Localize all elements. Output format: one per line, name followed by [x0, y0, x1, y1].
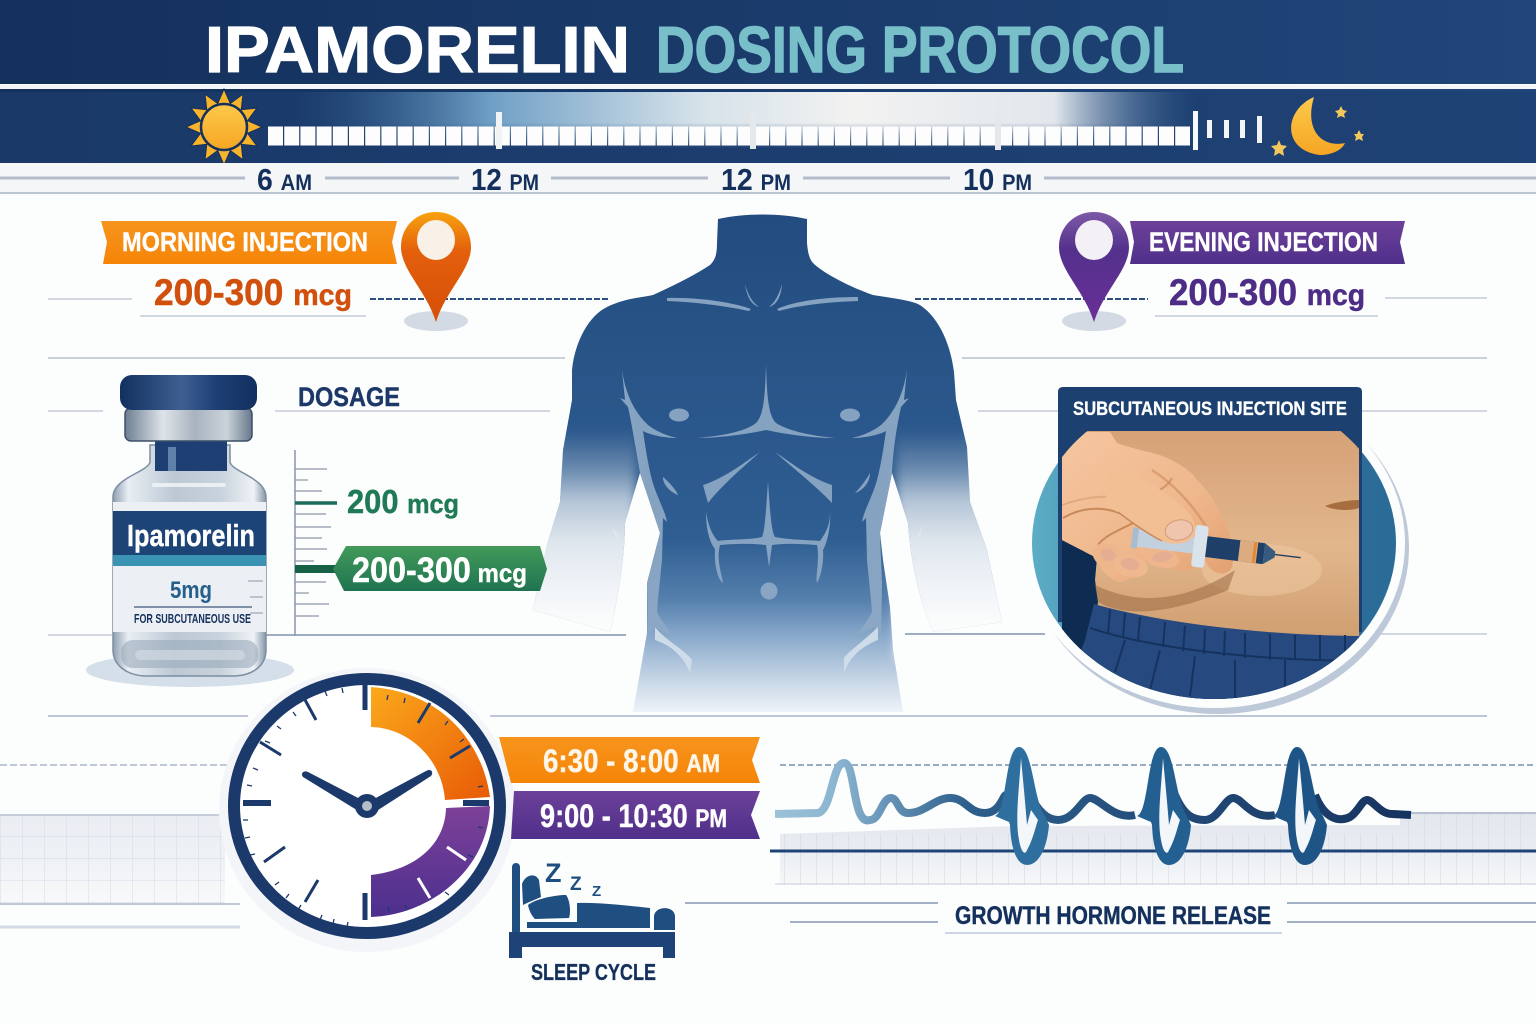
- banner: morning injection: [101, 221, 397, 264]
- vial label: 5mg: [170, 577, 212, 604]
- title text: IPAMORELIN: [205, 13, 630, 86]
- vial label: [113, 502, 266, 632]
- release curve: [775, 763, 1411, 820]
- fingers: [1093, 544, 1180, 578]
- icon: purple pin: [1059, 212, 1129, 331]
- pulse peak 3: [1273, 747, 1327, 865]
- thumb: [1106, 489, 1195, 544]
- banner: morning window: 6:30 - 8:00 AM: [543, 743, 720, 779]
- clock ticks: [243, 683, 489, 920]
- banner: evening window: [511, 791, 760, 839]
- icon: orange pin: [401, 212, 471, 331]
- card header: SUBCUTANEOUS INJECTION SITE: [1073, 399, 1347, 420]
- icon: moon and stars: [1271, 97, 1364, 156]
- time label: 12 PM second: 12 PM: [721, 162, 791, 197]
- clock: [219, 668, 515, 952]
- snore letters: Z: [570, 874, 582, 895]
- vial glass body: [113, 445, 266, 676]
- time label: 10 PM: 10 PM: [963, 162, 1032, 197]
- clock face: [234, 679, 500, 933]
- dose label: 200 mcg: 200 mcg: [347, 483, 459, 520]
- title banner: [0, 0, 1536, 89]
- disc frame: [1027, 382, 1409, 714]
- dashed connector: morning: [370, 298, 610, 300]
- left chart grid: [0, 815, 240, 927]
- banner: evening injection: EVENING INJECTION: [1149, 227, 1378, 257]
- vial label: FOR SUBCUTANEOUS USE: [134, 611, 251, 626]
- human torso silhouette: [533, 214, 1002, 712]
- snore letters: Z: [592, 883, 601, 900]
- morning injection: [101, 212, 610, 331]
- vial shadow: [86, 653, 294, 687]
- muscle definition: [613, 284, 922, 673]
- dashed connector: evening: [915, 298, 1148, 300]
- clock halo: [219, 668, 515, 952]
- banner: evening injection: [1130, 221, 1405, 264]
- injection site panel: [1023, 378, 1409, 720]
- banner: evening window: 9:00 - 10:30 PM: [540, 798, 727, 834]
- snore letters: Z: [545, 858, 562, 888]
- vial cap: [120, 375, 257, 441]
- pulse peak 2: [1137, 747, 1191, 865]
- time banners: [499, 737, 760, 839]
- dosage heading: DOSAGE: [298, 382, 400, 412]
- snore letters: [545, 858, 601, 900]
- evening dose: 200-300 mcg: [1169, 272, 1365, 313]
- evening injection: [915, 212, 1405, 331]
- morning window: [371, 687, 490, 800]
- growth hormone chart: [770, 747, 1536, 885]
- timeline band: [0, 89, 1536, 165]
- vial label: Ipamorelin: [127, 518, 255, 553]
- icon: sun: [186, 89, 262, 165]
- hand: [1062, 432, 1233, 582]
- pants: [1081, 604, 1359, 699]
- time label: 6 AM: 6 AM: [257, 162, 312, 197]
- time axis: [0, 162, 1536, 197]
- time label: 12 PM: 12 PM: [471, 162, 539, 197]
- arm fade: [533, 435, 1002, 663]
- banner: morning injection: MORNING INJECTION: [122, 227, 368, 257]
- card header: [1058, 387, 1362, 632]
- hand shadow: [1095, 570, 1235, 611]
- background rules: [0, 298, 1536, 933]
- clock hands: [302, 770, 432, 812]
- growth hormone label: GROWTH HORMONE RELEASE: [955, 902, 1271, 930]
- chart grid: [770, 812, 1536, 885]
- timeline scale: [268, 111, 1262, 150]
- tag: 200-300 mcg: 200-300 mcg: [352, 551, 527, 590]
- pulse peak 1: [995, 747, 1049, 865]
- morning dose: 200-300 mcg: [154, 272, 352, 313]
- title accent text: DOSING PROTOCOL: [656, 13, 1184, 86]
- photo: injection into abdomen: [1062, 431, 1359, 720]
- icon: bed with sleeper: [509, 858, 675, 958]
- syringe: [1130, 525, 1301, 568]
- dosage scale: [295, 450, 547, 636]
- banner: morning window: [499, 737, 760, 783]
- body shape: [533, 214, 1002, 712]
- evening window: [371, 806, 490, 917]
- vial: [86, 375, 294, 687]
- sleep cycle label: SLEEP CYCLE: [531, 959, 656, 985]
